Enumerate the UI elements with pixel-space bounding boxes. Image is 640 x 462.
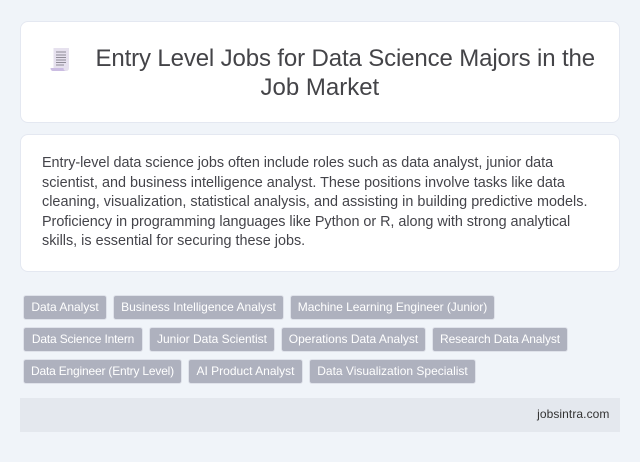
tag: Research Data Analyst: Research Data Analyst	[440, 332, 560, 346]
tag: Business Intelligence Analyst: Business Intelligence Analyst	[121, 300, 276, 314]
tag: AI Product Analyst: AI Product Analyst	[196, 364, 295, 378]
tag: Data Visualization Specialist	[309, 359, 476, 384]
icon: document scroll	[50, 48, 69, 71]
tag: Junior Data Scientist	[149, 327, 275, 352]
tag: Research Data Analyst	[432, 327, 568, 352]
tag: Data Analyst	[23, 295, 107, 320]
description text: Entry-level data science jobs often include roles such as data analyst, junior data	[42, 155, 553, 171]
description text: scientist, and business intelligence analyst. These positions involve tasks like data	[42, 174, 565, 190]
tag: Data Engineer (Entry Level): Data Engineer (Entry Level)	[31, 364, 174, 378]
description text: cleaning, visualization, statistical analysis, and assisting in building predictive models.	[42, 194, 587, 210]
tag: Data Engineer (Entry Level)	[23, 359, 182, 384]
description text: skills, is essential for securing these jobs.	[42, 233, 305, 249]
title: Entry Level Jobs for Data Science Majors in the	[96, 45, 595, 72]
tag: Machine Learning Engineer (Junior): Machine Learning Engineer (Junior)	[298, 300, 487, 314]
tag: Data Visualization Specialist: Data Visualization Specialist	[317, 364, 468, 378]
tag: Operations Data Analyst: Operations Data Analyst	[289, 332, 418, 346]
title	[96, 45, 595, 101]
tag: Data Science Intern: Data Science Intern	[32, 332, 134, 346]
tag: Business Intelligence Analyst	[113, 295, 284, 320]
footer source text: jobsintra.com	[537, 407, 610, 421]
tag: Machine Learning Engineer (Junior)	[290, 295, 495, 320]
description text	[42, 155, 587, 249]
tag: Operations Data Analyst	[281, 327, 426, 352]
title: Job Market	[260, 74, 379, 101]
panel: description card	[20, 134, 620, 272]
panel: header card	[20, 21, 620, 123]
footer bar	[20, 398, 620, 432]
tag: Junior Data Scientist: Junior Data Scientist	[157, 332, 267, 346]
description text: Proficiency in programming languages like Python or R, along with strong analytical	[42, 214, 570, 230]
tag: AI Product Analyst	[188, 359, 303, 384]
tag: Data Science Intern	[23, 327, 143, 352]
tag: Data Analyst: Data Analyst	[31, 300, 99, 314]
